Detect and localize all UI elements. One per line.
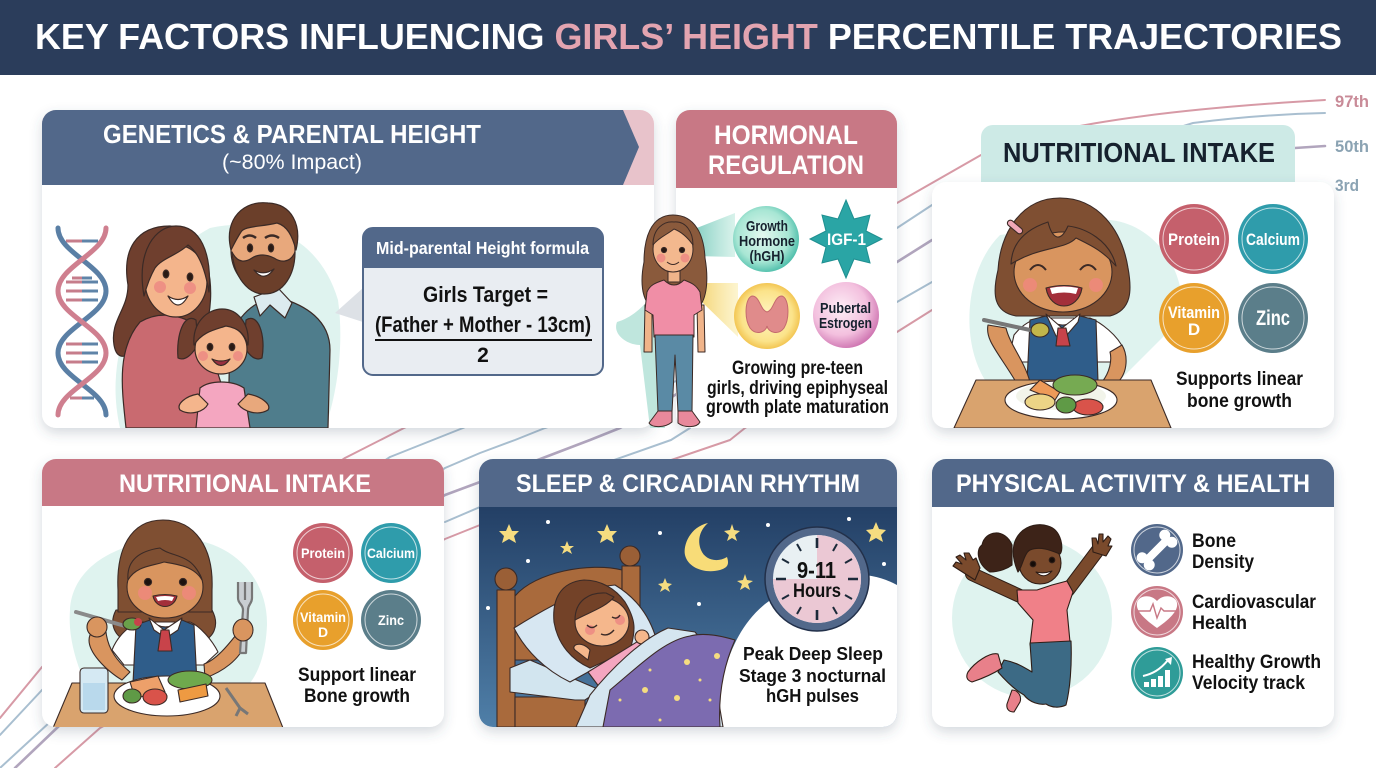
formula box: Girls Target = [423, 282, 548, 307]
nutrient badges: Vitamin [1168, 303, 1220, 322]
caption: peak deep sleep: Stage 3 nocturnal [739, 665, 886, 686]
label: healthy growth velocity track [1192, 652, 1321, 694]
nutrient badges [293, 523, 421, 650]
heading: nutritional intake [42, 459, 444, 506]
heading tab: nutritional intake: NUTRITIONAL INTAKE [1003, 137, 1275, 168]
heading: nutritional intake: NUTRITIONAL INTAKE [119, 470, 371, 498]
heading banner: genetics [42, 110, 654, 185]
caption: support linear bone growth [298, 665, 417, 707]
percentile labels: 50th [1335, 137, 1369, 156]
night sky scene [479, 506, 897, 728]
label: bone density [1192, 531, 1254, 573]
panel: nutritional intake bottom left [42, 459, 444, 728]
icon: clock 9-11 hours [765, 527, 869, 631]
bubble: growth hormone: Growth [746, 218, 788, 235]
nutrient badges [1159, 204, 1308, 353]
heading: sleep: SLEEP & CIRCADIAN RHYTHM [516, 470, 860, 498]
caption: hormonal [706, 358, 889, 418]
caption: peak deep sleep: Peak Deep Sleep [743, 643, 883, 664]
illustration: family of three [113, 203, 340, 428]
bubble: pubertal estrogen: Estrogen [819, 315, 872, 332]
formula box [363, 228, 603, 375]
icon: growth chart [1131, 647, 1183, 699]
panel: nutritional intake top right [932, 125, 1334, 428]
badge: IGF-1 star: IGF-1 [827, 230, 866, 249]
pointer to formula [335, 288, 363, 322]
panel: genetics and parental height [42, 110, 654, 428]
panel: hormonal regulation [616, 110, 897, 428]
nutrient badges: Zinc [378, 612, 404, 628]
caption: peak deep sleep [739, 643, 886, 706]
illustration: standing pre-teen girl with hormone beams [616, 213, 738, 428]
badge: IGF-1 star [810, 200, 882, 278]
icon: DNA helix [58, 228, 106, 415]
bubble: pubertal estrogen: Pubertal [820, 300, 871, 317]
percentile labels: 97th [1335, 92, 1369, 111]
caption: support linear bone growth: Bone growth [304, 686, 410, 707]
caption: hormonal: growth plate maturation [706, 397, 889, 418]
percentile labels: 3rd [1335, 176, 1359, 195]
moon [685, 523, 728, 571]
caption: support linear bone growth: Support linear [298, 665, 417, 686]
nutrient badges: D [318, 624, 328, 640]
illustration: girl with fork and plate [53, 520, 283, 728]
heading: sleep [479, 459, 897, 507]
heading: physical activity [932, 459, 1334, 507]
caption: peak deep sleep: hGH pulses [766, 685, 859, 706]
nutrient badges: Calcium [1246, 230, 1300, 249]
nutrient badges: Zinc [1256, 307, 1290, 330]
caption: supports linear bone growth [1176, 369, 1304, 412]
icon: clock 9-11 hours: 9-11 [797, 557, 836, 583]
formula box: (Father + Mother - 13cm) [375, 312, 591, 337]
label: healthy growth velocity track: Velocity track [1192, 673, 1305, 694]
icon: bone density [1131, 524, 1183, 576]
bubble: growth hormone: (hGH) [750, 248, 785, 265]
heading tab: nutritional intake [981, 125, 1295, 186]
panel: physical activity and health [932, 459, 1334, 727]
bubble: growth hormone [733, 206, 799, 272]
nutrient badges: Vitamin [300, 609, 346, 625]
caption: hormonal: Growing pre-teen [732, 358, 863, 379]
white caption blob [719, 574, 897, 728]
caption: supports linear bone growth: Supports linear [1176, 369, 1304, 390]
label: healthy growth velocity track: Healthy Growth [1192, 652, 1321, 673]
nutrient badges: D [1188, 320, 1200, 339]
icon: clock 9-11 hours: Hours [793, 581, 841, 602]
label: cardiovascular health: Cardiovascular [1192, 592, 1317, 613]
label: bone density: Bone [1192, 531, 1236, 552]
heading banner: genetics: (~80% Impact) [222, 151, 362, 174]
nutrient badges: Protein [1168, 230, 1220, 249]
title banner: KEY FACTORS INFLUENCING GIRLS’ HEIGHT PERCENTILE TRAJECTORIES [35, 16, 1342, 57]
formula box: 2 [477, 344, 489, 367]
nutrient badges: Protein [301, 545, 345, 561]
percentile labels [1335, 92, 1369, 195]
heading banner: genetics: GENETICS & PARENTAL HEIGHT [103, 119, 481, 149]
heading: hormonal regulation [676, 110, 897, 188]
heading: physical activity: PHYSICAL ACTIVITY & HEALTH [956, 470, 1310, 498]
heading: hormonal regulation: HORMONAL [714, 120, 858, 150]
panel: sleep and circadian rhythm [479, 459, 897, 728]
illustration: sleeping girl in bed [495, 546, 735, 727]
illustration: girl eating at table [954, 198, 1182, 428]
stars [499, 522, 886, 592]
nutrient badges: Calcium [367, 545, 415, 561]
caption: supports linear bone growth: bone growth [1187, 391, 1292, 412]
label: cardiovascular health: Health [1192, 613, 1247, 634]
caption: hormonal: girls, driving epiphyseal [707, 378, 888, 399]
label: bone density: Density [1192, 552, 1254, 573]
title banner [0, 0, 1376, 75]
formula box: Mid-parental Height formula [376, 238, 589, 258]
bubble: thyroid [734, 283, 800, 349]
heading: hormonal regulation: REGULATION [708, 150, 864, 180]
illustration: jumping girl [952, 525, 1112, 712]
bubble: growth hormone: Hormone [739, 233, 795, 250]
bubble: pubertal estrogen [813, 282, 879, 348]
icon: cardiovascular heart [1131, 586, 1183, 638]
label: cardiovascular health [1192, 592, 1317, 634]
